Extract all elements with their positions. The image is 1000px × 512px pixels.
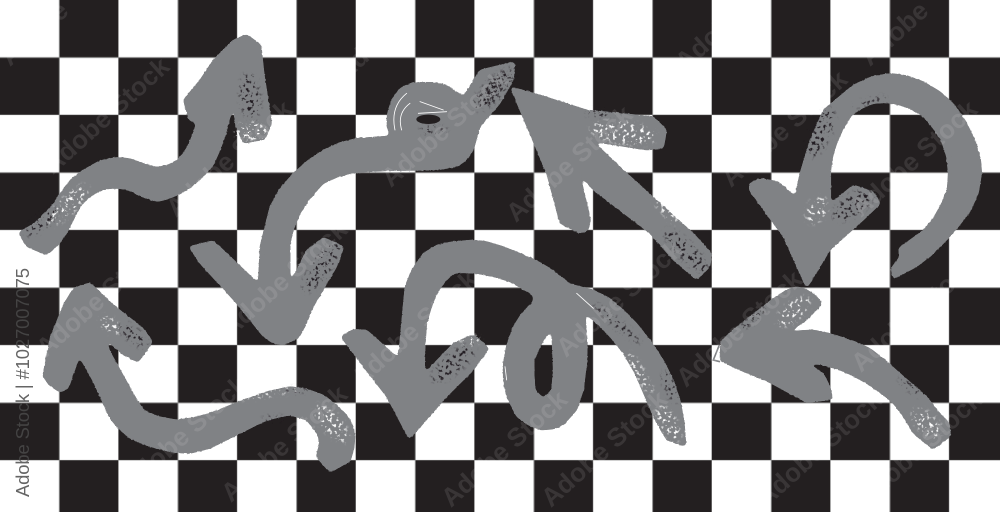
arrow: curved arrow pointing left xyxy=(713,287,951,449)
watermark: repeated Adobe Stock text: Adobe Stock xyxy=(750,384,888,512)
side credit text: Adobe Stock | #1027007075 xyxy=(12,268,33,497)
watermark: repeated Adobe Stock text: Adobe xyxy=(669,0,749,77)
arrow: straight arrow pointing up-left xyxy=(510,87,714,280)
arrow: curved arrow looping round and pointing down xyxy=(749,73,982,288)
watermark: repeated Adobe Stock text: Adobe Stock xyxy=(215,214,353,343)
watermark: repeated Adobe Stock text: Adobe Stock xyxy=(535,384,673,512)
arrow: lower-left wavy arrow pointing up-left xyxy=(43,283,355,472)
watermark: repeated Adobe Stock text: Adobe Stock xyxy=(670,264,808,393)
watermark: repeated Adobe Stock text: Adobe Stock xyxy=(375,64,513,193)
watermark: repeated Adobe Stock text: Adobe Stock xyxy=(500,99,638,228)
arrow: curly looped arrow pointing down xyxy=(341,240,686,447)
watermark: repeated Adobe Stock text: Adobe Stock xyxy=(850,384,988,512)
arrow: looped arrow pointing down xyxy=(189,62,520,345)
watermark: repeated Adobe Stock text: Adobe xyxy=(329,10,409,87)
watermark: repeated Adobe Stock text: Adobe Stock xyxy=(550,234,688,363)
watermark: repeated Adobe Stock text: Adobe Stock xyxy=(37,51,175,180)
watermark: repeated Adobe Stock text: Adobe Stock xyxy=(215,379,353,508)
watermark: repeated Adobe Stock text: Adobe Stock xyxy=(845,94,983,223)
watermark: repeated Adobe Stock text: Adobe Stock xyxy=(345,264,483,393)
watermark: repeated Adobe Stock text: Adobe Stock xyxy=(30,234,168,363)
arrow: top-left wavy arrow pointing up xyxy=(18,34,272,255)
watermark: repeated Adobe Stock text: Adobe Stock xyxy=(435,384,573,512)
watermark: repeated Adobe Stock text: Adobe Stock xyxy=(845,249,983,378)
watermark: repeated Adobe Stock text: Adobe Stock xyxy=(115,369,253,498)
icon: loop opening xyxy=(416,115,440,124)
watermark: repeated Adobe Stock text: Adobe Stock xyxy=(715,64,853,193)
watermark: repeated Adobe Stock text: Adobe Stock xyxy=(160,94,298,223)
